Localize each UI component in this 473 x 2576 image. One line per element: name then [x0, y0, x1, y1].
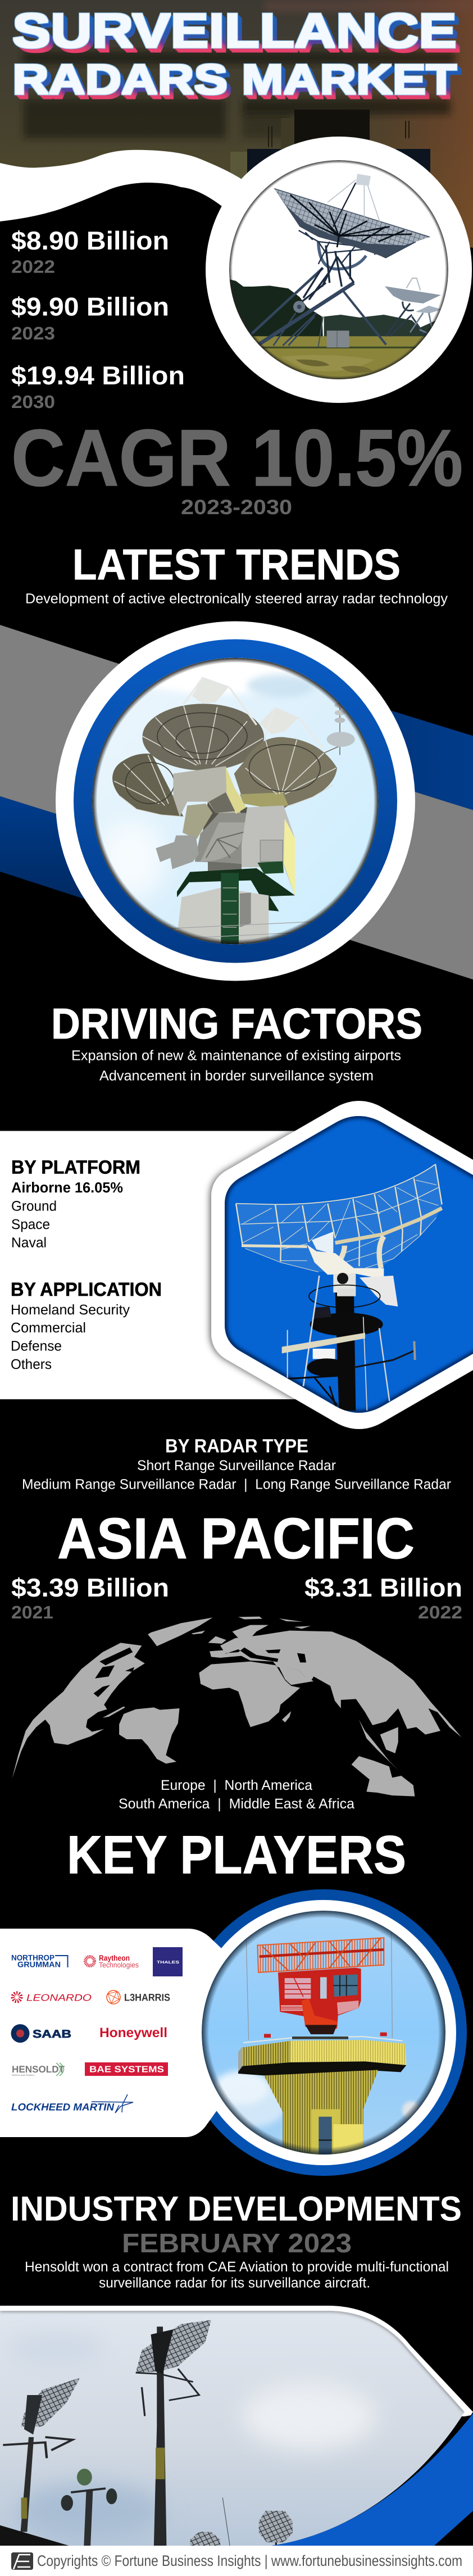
photo: airport radar tower [202, 1911, 445, 2156]
logo: Raytheon Technologies [85, 1953, 139, 1969]
segment text: by platform: Naval [11, 1235, 47, 1251]
logo: Lockheed Martin [11, 2094, 133, 2113]
logo: Hensoldt: Detect and Protect [12, 2074, 35, 2076]
panel: company logos [0, 1929, 242, 2137]
other regions text [119, 1777, 354, 1812]
date: FEBRUARY 2023 [122, 2229, 352, 2258]
white frame stripe [0, 2306, 473, 2416]
text: development detail: surveillance radar for its surveillance aircraft. [99, 2275, 370, 2291]
year 2023: 2023 [11, 323, 55, 343]
value 2022: $8.90 Billion [11, 226, 169, 255]
text: driving factors [71, 1047, 401, 1083]
segment text: by platform: BY PLATFORM [11, 1157, 140, 1178]
segment text: by platform: Airborne 16.05% [11, 1179, 123, 1196]
other regions text: Europe | North America [161, 1777, 312, 1793]
logo: Raytheon Technologies: Technologies [99, 1961, 139, 1969]
year 2030: 2030 [11, 392, 55, 412]
logo: Northrop Grumman [11, 1953, 67, 1969]
year 2022: 2022 [11, 256, 55, 276]
text: driving factors: Advancement in border surveillance system [99, 1068, 374, 1083]
logo: Saab: SAAB [33, 2028, 71, 2040]
logo: BAE Systems: BAE SYSTEMS [89, 2065, 164, 2075]
title: RADARS MARKET [12, 56, 457, 103]
title: SURVEILLANCE [12, 4, 457, 58]
segment text: by application: Commercial [11, 1320, 86, 1336]
regional values: $3.31 Billion [304, 1573, 462, 1602]
segment text: by radar type: BY RADAR TYPE [165, 1435, 308, 1457]
footer logo [11, 2552, 33, 2570]
photo: twin satellite dishes [92, 655, 379, 945]
heading: key players: KEY PLAYERS [67, 1825, 406, 1885]
segment text: by application [11, 1279, 162, 1372]
world map globe [12, 1617, 462, 1797]
text: driving factors: Expansion of new & maintenance of existing airports [71, 1047, 401, 1063]
value 2023: $9.90 Billion [11, 292, 169, 321]
segment text: by application: Others [11, 1357, 52, 1372]
value 2030: $19.94 Billion [11, 361, 185, 390]
white circle frame [206, 137, 472, 403]
regional values: 2022 [418, 1602, 462, 1622]
hexagon frame [211, 1101, 473, 1429]
logo: Thales [153, 1947, 183, 1976]
text: development detail [25, 2259, 449, 2291]
circle frame: white and blue rings [56, 622, 415, 981]
title [12, 4, 457, 103]
black area under wave [0, 183, 473, 393]
other regions text: South America | Middle East & Africa [119, 1796, 354, 1812]
logo: Thales: THALES [157, 1961, 179, 1965]
segment text: by application: Homeland Security [11, 1302, 130, 1318]
segment text: by radar type [22, 1435, 451, 1493]
photo: radio telescope dishes [229, 160, 448, 379]
heading: industry developments: INDUSTRY DEVELOPMENTS [11, 2189, 462, 2229]
logo: Leonardo: LEONARDO [26, 1993, 92, 2003]
text: latest trends: Development of active electronically steered array radar technology [25, 591, 448, 607]
segment text: by application: Defense [11, 1339, 62, 1354]
text: development detail: Hensoldt won a contract from CAE Aviation to provide multi-functional [25, 2259, 449, 2275]
logo: L3Harris [107, 1990, 170, 2004]
logo: Northrop Grumman: GRUMMAN [17, 1960, 61, 1969]
header photo background [0, 0, 473, 248]
blue corner shape [271, 2414, 473, 2546]
logo: Raytheon Technologies: Raytheon [99, 1953, 130, 1962]
photo: rotating radar antenna [225, 1109, 473, 1419]
market size figures [11, 226, 185, 412]
CAGR period: 2023-2030 [181, 496, 292, 519]
regional values: $3.39 Billion [11, 1573, 169, 1602]
logo: Lockheed Martin: LOCKHEED MARTIN [11, 2102, 115, 2113]
logo: Saab [11, 2024, 71, 2043]
regional values: 2021 [11, 1602, 53, 1622]
logo: Hensoldt: HENSOLDT [12, 2064, 65, 2075]
circle frame: blue and white rings [180, 1889, 467, 2176]
heading: driving factors: DRIVING FACTORS [51, 1000, 422, 1048]
heading: latest trends: LATEST TRENDS [72, 541, 401, 589]
segment text: by radar type: Medium Range Surveillance Radar | Long Range Surveillance Radar [22, 1477, 451, 1493]
segment text: by platform: Space [11, 1217, 50, 1232]
white wave [0, 150, 247, 225]
footer bar [0, 2546, 473, 2576]
logo: Leonardo [13, 1993, 92, 2003]
segment text: by platform [11, 1157, 140, 1251]
segment text: by platform: Ground [11, 1198, 57, 1214]
logo: Honeywell: Honeywell [99, 2025, 167, 2040]
regional values [11, 1573, 462, 1622]
diagonal bands [0, 625, 473, 979]
panel: segmentation [0, 1131, 303, 1399]
photo: military radar masts [0, 2311, 466, 2547]
heading: asia pacific: ASIA PACIFIC [57, 1506, 415, 1571]
logo: L3Harris: L3HARRIS [124, 1992, 170, 2003]
segment text: by application: BY APPLICATION [11, 1279, 162, 1300]
segment text: by radar type: Short Range Surveillance Radar [137, 1458, 336, 1473]
logo: BAE Systems [85, 2062, 168, 2076]
logo: Northrop Grumman: NORTHROP [11, 1953, 54, 1962]
